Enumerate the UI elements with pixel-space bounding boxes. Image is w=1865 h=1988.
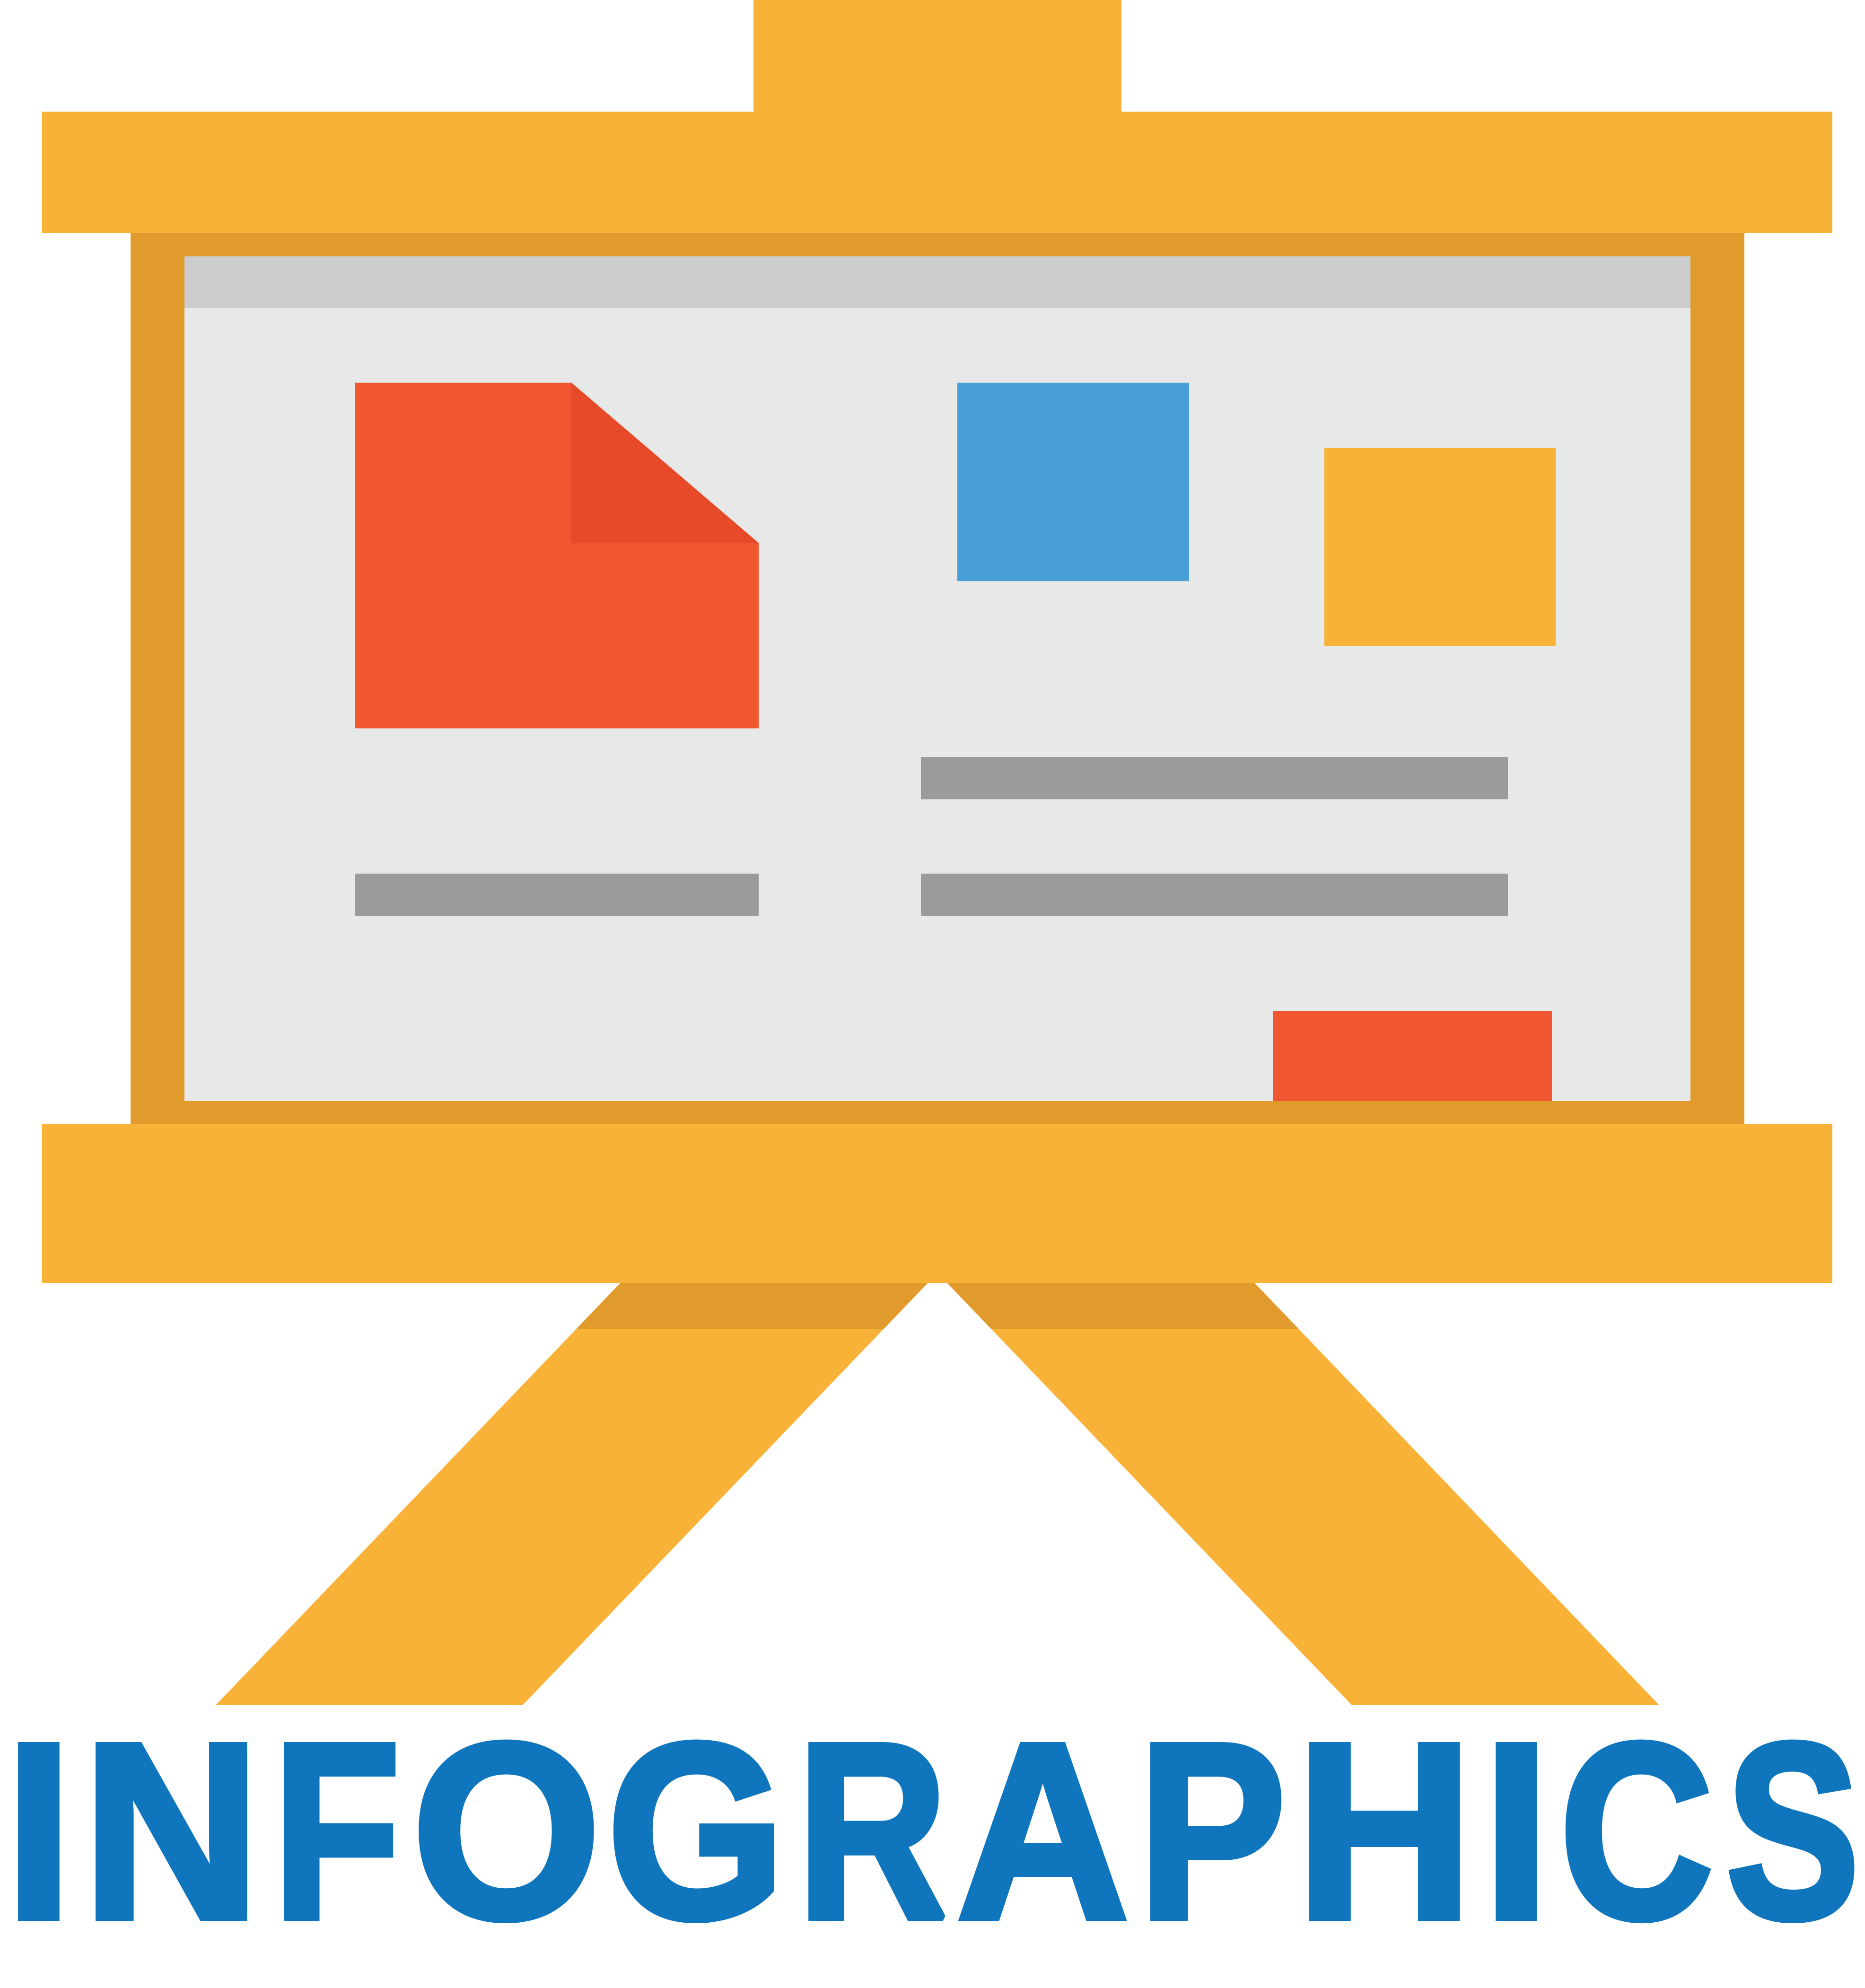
- screen header band: [184, 256, 1690, 308]
- text line: left: [355, 874, 759, 916]
- title: C: [1559, 1691, 1713, 1971]
- title: A: [957, 1691, 1129, 1971]
- title: I: [1483, 1691, 1550, 1971]
- icon: red document with folded corner: [355, 383, 759, 728]
- left easel leg: [216, 1283, 928, 1705]
- text line: right upper: [921, 757, 1508, 799]
- title: R: [797, 1691, 947, 1971]
- text line: right lower: [921, 874, 1508, 916]
- title: O: [412, 1691, 601, 1971]
- title: N: [82, 1691, 261, 1971]
- bottom bar: [42, 1124, 1832, 1283]
- title: F: [272, 1691, 400, 1971]
- top bar: [42, 112, 1832, 233]
- title: P: [1138, 1691, 1286, 1971]
- board frame: [131, 233, 1744, 1124]
- title: I: [5, 1691, 72, 1971]
- title: H: [1296, 1691, 1473, 1971]
- small red block: [1273, 1011, 1552, 1101]
- top hanger tab: [753, 0, 1121, 114]
- orange block: [1324, 448, 1556, 646]
- blue block: [957, 383, 1189, 581]
- title: G: [607, 1691, 785, 1971]
- right easel leg: [947, 1283, 1659, 1705]
- panel: screen: [184, 256, 1690, 1101]
